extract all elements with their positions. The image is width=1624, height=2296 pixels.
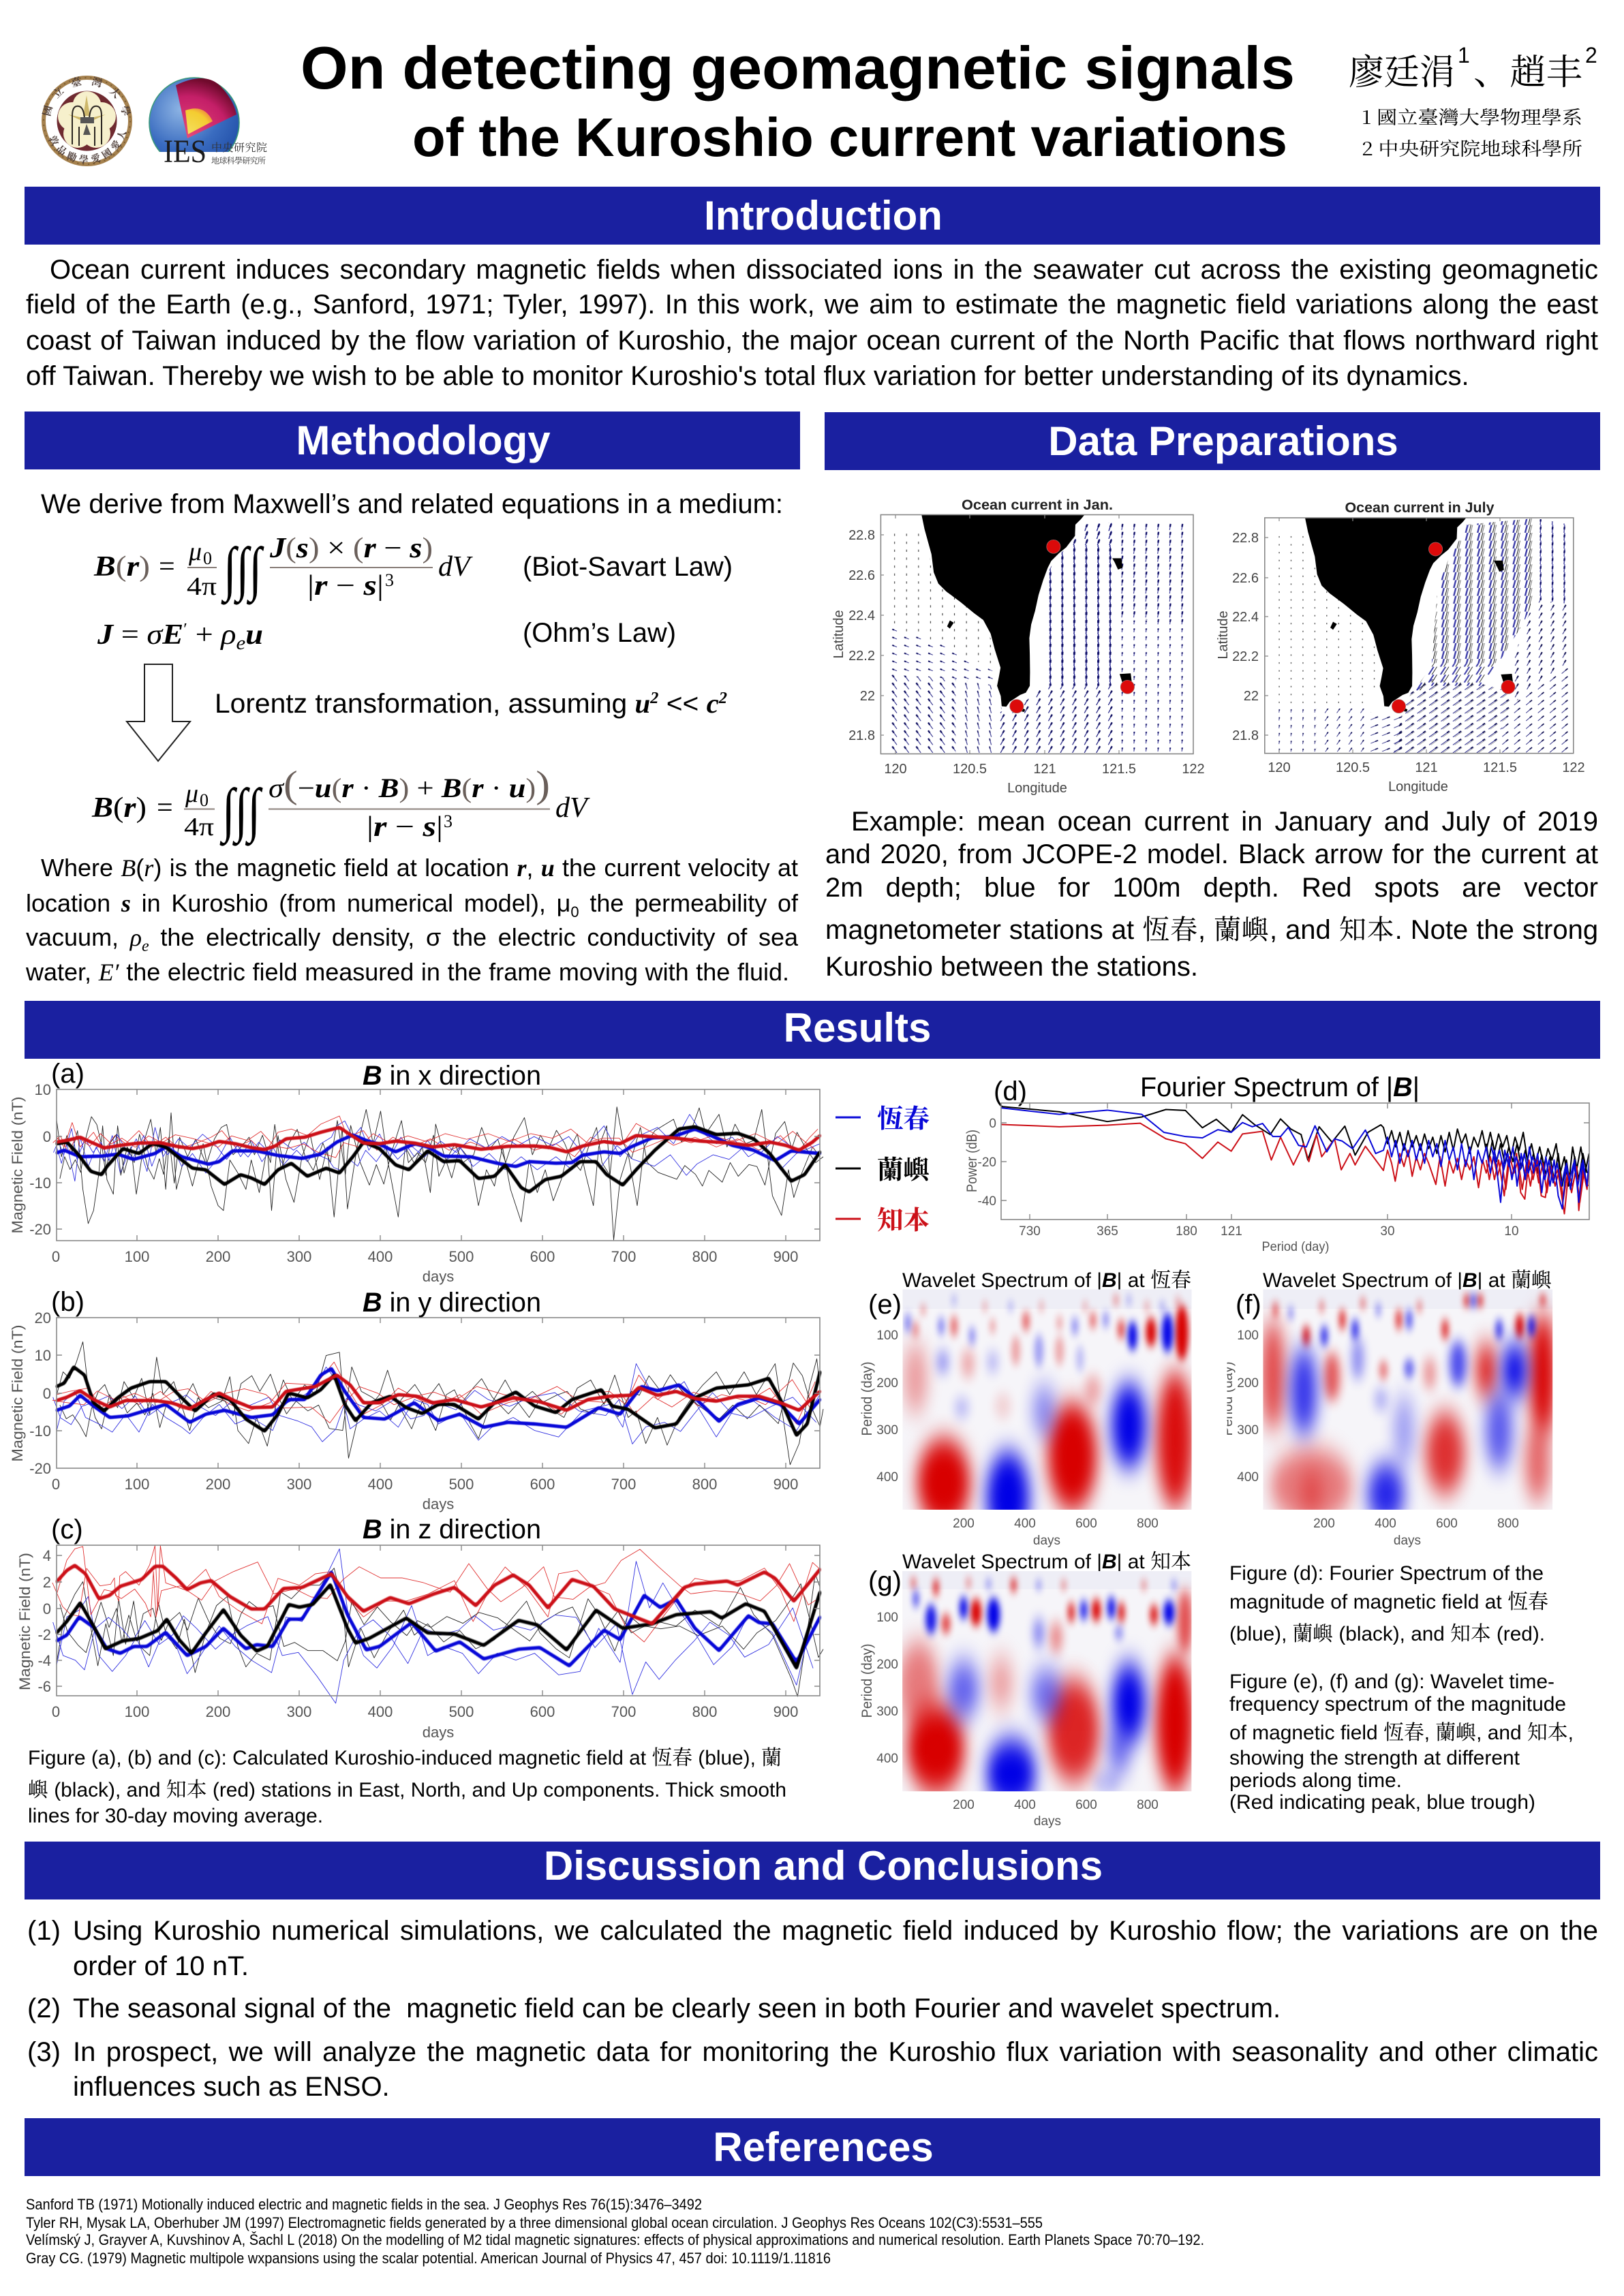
chart (g): wavelet spectrum at Zhiben: Period (day) bbox=[859, 1643, 875, 1718]
heading: Discussion and Conclusions: Discussion and Conclusions bbox=[544, 1843, 1103, 1889]
equation: Ohm's law: ρ bbox=[219, 619, 236, 651]
chart (d): Fourier spectrum: Power (dB) bbox=[964, 1130, 980, 1192]
chart (e): wavelet spectrum at Hengchun: 200 bbox=[876, 1376, 898, 1391]
methodology intro sentence: We derive from Maxwell’s and related equations in a medium: bbox=[41, 489, 783, 519]
heading: Results bbox=[25, 1001, 1600, 1059]
equation: Biot-Savart law: J(s) × (r − s) bbox=[269, 533, 433, 564]
text block: methodology symbol definitions bbox=[26, 854, 799, 986]
chart (f): wavelet spectrum at Lanyu: 400 bbox=[1237, 1470, 1259, 1485]
chart (b): B in y direction: B in y direction bbox=[363, 1288, 541, 1318]
map: ocean current in January: 121 bbox=[1033, 762, 1056, 777]
equation: induced magnetic field: dV bbox=[555, 792, 590, 824]
text block: discussion and conclusions list: influences such as ENSO. bbox=[73, 2072, 390, 2102]
map: ocean current in July: 22.6 bbox=[1232, 571, 1259, 586]
caption: figure d: magnitude of magnetic field at 恆春 bbox=[1229, 1591, 1548, 1613]
chart (a): B in x direction: 0 bbox=[43, 1128, 51, 1145]
label: Lorentz transformation: Lorentz transformation, assuming u bbox=[215, 688, 650, 719]
chart (b): B in y direction: 800 bbox=[692, 1476, 717, 1493]
text block: data preparations description bbox=[825, 807, 1598, 982]
heading: Data Preparations: Data Preparations bbox=[1048, 418, 1398, 464]
text block: introduction paragraph: coast of Taiwan induced by the flow variation of Kuroshio, the major ocean current of the North Pacific that flows northward right bbox=[26, 326, 1598, 356]
map: ocean current in July: 22.8 bbox=[1232, 531, 1259, 546]
chart (f): wavelet spectrum at Lanyu: 100 bbox=[1237, 1329, 1259, 1343]
chart (b): B in y direction: Magnetic Field (nT) bbox=[9, 1324, 26, 1462]
map: ocean current in January: 22 bbox=[860, 689, 875, 704]
heading: Introduction bbox=[25, 187, 1600, 245]
chart (e): wavelet spectrum at Hengchun: 800 bbox=[1137, 1517, 1159, 1531]
chart (c): B in z direction: -2 bbox=[37, 1626, 51, 1643]
caption: figures a, b and c: 嶼 (black), and 知本 (red) stations in East, North, and Up components. Thick smooth bbox=[28, 1779, 786, 1801]
chart (g): wavelet spectrum at Zhiben: 400 bbox=[876, 1752, 898, 1766]
equation: Biot-Savart law: dV bbox=[438, 551, 473, 583]
text block: discussion and conclusions list: (1) bbox=[27, 1916, 61, 1946]
chart (a): B in x direction: days bbox=[423, 1268, 454, 1285]
chart (c): B in z direction: 2 bbox=[43, 1574, 51, 1591]
heading: Methodology bbox=[25, 412, 800, 469]
equation: induced magnetic field: σ(−u(r · B) + B(r · u)) bbox=[269, 764, 550, 806]
caption: figures e, f and g: (Red indicating peak, blue trough) bbox=[1229, 1791, 1535, 1814]
chart (b): B in y direction: -20 bbox=[29, 1460, 51, 1477]
equation: induced magnetic field: ∫∫∫ bbox=[219, 777, 263, 846]
map: ocean current in July: 121 bbox=[1415, 760, 1438, 775]
caption: figure d: (blue), 蘭嶼 (black), and 知本 (red). bbox=[1229, 1623, 1545, 1645]
chart (a): B in x direction: -20 bbox=[29, 1221, 51, 1238]
chart (a): B in x direction: B in x direction bbox=[363, 1061, 541, 1091]
chart (a): B in x direction: 400 bbox=[368, 1248, 393, 1265]
equation: Ohm's law: J = σE bbox=[97, 619, 181, 651]
chart (b): B in y direction: 300 bbox=[287, 1476, 311, 1493]
text block: discussion and conclusions list: order of 10 nT. bbox=[73, 1951, 249, 1981]
map: ocean current in July: 121.5 bbox=[1483, 760, 1517, 775]
map: ocean current in July: Latitude bbox=[1216, 610, 1231, 660]
logo: National Taiwan University seal: 敦品勵學愛國愛人 bbox=[49, 131, 127, 164]
map: ocean current in January: Longitude bbox=[1007, 781, 1067, 796]
text block: introduction paragraph: Ocean current induces secondary magnetic fields when dissociated ions in the seawater cut across the existing geomagnetic bbox=[50, 255, 1598, 285]
chart (a): B in x direction: 800 bbox=[692, 1248, 717, 1265]
references list: Gray CG. (1979) Magnetic multipole wxpansions using the scalar potential. American Journal of Physics 47, 457 doi: 10.1119/1.11816 bbox=[26, 2250, 831, 2267]
caption: figure d: Figure (d): Fourier Spectrum of the bbox=[1229, 1562, 1544, 1585]
caption: figure d bbox=[1229, 1562, 1548, 1645]
chart (b): B in y direction: 0 bbox=[43, 1385, 51, 1402]
chart (c): B in z direction: 300 bbox=[287, 1703, 311, 1720]
text block: discussion and conclusions list: (2) bbox=[27, 1994, 61, 2023]
map: ocean current in January: 22.4 bbox=[848, 608, 875, 623]
affiliations: 2 中央研究院地球科學所 bbox=[1362, 134, 1582, 161]
chart (c): B in z direction: 400 bbox=[368, 1703, 393, 1720]
chart (c): B in z direction: -6 bbox=[37, 1678, 51, 1695]
equation: Biot-Savart law: 3 bbox=[385, 570, 394, 590]
chart (a): B in x direction: 500 bbox=[449, 1248, 474, 1265]
text block: methodology symbol definitions: location s in Kuroshio (from numerical model), μ0 the permeability of bbox=[26, 889, 798, 920]
chart (b): B in y direction: 900 bbox=[773, 1476, 798, 1493]
label: Lorentz transformation: c bbox=[707, 688, 719, 719]
heading: Results: Results bbox=[784, 1005, 931, 1051]
map: ocean current in July: 120.5 bbox=[1336, 760, 1370, 775]
chart (b): B in y direction bbox=[9, 1287, 823, 1512]
equation: Biot-Savart law: = bbox=[159, 551, 175, 583]
chart (g): wavelet spectrum at Zhiben: 600 bbox=[1075, 1798, 1097, 1812]
heading: References: References bbox=[713, 2124, 934, 2170]
text block: data preparations description: 2m depth; blue for 100m depth. Red spots are vector bbox=[825, 873, 1598, 903]
text block: discussion and conclusions list: The seasonal signal of the magnetic field can be clearly seen in both Fourier and wavelet spectrum. bbox=[73, 1994, 1281, 2023]
chart (b): B in y direction: 200 bbox=[206, 1476, 230, 1493]
caption: figures a, b and c bbox=[28, 1747, 786, 1827]
chart (g): wavelet spectrum at Zhiben: Wavelet Spectrum of |B| at 知本 bbox=[902, 1551, 1191, 1573]
text block: methodology symbol definitions: Where B(r) is the magnetic field at location r, u the current velocity at bbox=[41, 854, 798, 882]
text block: methodology symbol definitions: water, E′ the electric field measured in the frame moving with the fluid. bbox=[26, 958, 789, 986]
chart (a): B in x direction: 200 bbox=[206, 1248, 230, 1265]
chart (g): wavelet spectrum at Zhiben: 300 bbox=[876, 1705, 898, 1719]
map: ocean current in January: Ocean current in Jan. bbox=[962, 497, 1113, 513]
caption: figures e, f and g: frequency spectrum of the magnitude bbox=[1229, 1693, 1566, 1716]
equation: Biot-Savart law bbox=[93, 533, 473, 605]
chart (b): B in y direction: 10 bbox=[35, 1347, 51, 1364]
chart (d): Fourier spectrum: -40 bbox=[978, 1194, 996, 1209]
equation: induced magnetic field: B(r) bbox=[91, 792, 147, 824]
chart (d): Fourier spectrum: Fourier Spectrum of |B| bbox=[1140, 1072, 1420, 1102]
chart (g): wavelet spectrum at Zhiben: 100 bbox=[876, 1611, 898, 1625]
chart (a): B in x direction: (a) bbox=[51, 1059, 85, 1089]
chart (f): wavelet spectrum at Lanyu bbox=[1216, 1269, 1556, 1548]
caption: figures e, f and g: showing the strength at different bbox=[1229, 1747, 1520, 1769]
label: Lorentz transformation: << bbox=[658, 689, 707, 719]
chart (b): B in y direction: 600 bbox=[530, 1476, 555, 1493]
caption: figures e, f and g: periods along time. bbox=[1229, 1769, 1402, 1792]
chart (f): wavelet spectrum at Lanyu: 200 bbox=[1313, 1517, 1335, 1531]
caption: figures a, b and c: Figure (a), (b) and (c): Calculated Kuroshio-induced magnetic field at 恆春 (blue), 蘭 bbox=[28, 1747, 782, 1769]
chart (g): wavelet spectrum at Zhiben: 400 bbox=[1014, 1798, 1036, 1812]
chart (a): B in x direction: 600 bbox=[530, 1248, 555, 1265]
authors: 、趙丰 bbox=[1473, 44, 1582, 95]
chart (a): B in x direction: 100 bbox=[125, 1248, 149, 1265]
map: ocean current in July bbox=[1216, 500, 1585, 794]
references list: Tyler RH, Mysak LA, Oberhuber JM (1997) Electromagnetic fields generated by a three dimensional global ocean circulation. J Geophys Res Oceans 102(C3):5531–555 bbox=[26, 2214, 1043, 2231]
chart (f): wavelet spectrum at Lanyu: 400 bbox=[1375, 1517, 1396, 1531]
chart (f): wavelet spectrum at Lanyu: (f) bbox=[1236, 1290, 1261, 1320]
chart (c): B in z direction: -4 bbox=[37, 1652, 51, 1669]
chart (c): B in z direction: 0 bbox=[52, 1703, 60, 1720]
equation: induced magnetic field bbox=[91, 764, 590, 846]
text block: data preparations description: and 2020, from JCOPE-2 model. Black arrow for the current at bbox=[825, 839, 1598, 869]
map: ocean current in July: 22.4 bbox=[1232, 610, 1259, 625]
heading: Data Preparations bbox=[825, 412, 1600, 470]
equation: Biot-Savart law: 0 bbox=[203, 548, 212, 568]
chart (e): wavelet spectrum at Hengchun: 400 bbox=[1014, 1517, 1036, 1531]
caption: figures e, f and g: of magnetic field 恆春, 蘭嶼, and 知本, bbox=[1229, 1722, 1574, 1744]
chart (e): wavelet spectrum at Hengchun bbox=[859, 1269, 1194, 1548]
chart (e): wavelet spectrum at Hengchun: 600 bbox=[1075, 1517, 1097, 1531]
affiliations bbox=[1362, 103, 1582, 161]
text block: methodology symbol definitions: vacuum, ρe the electrically density, σ the electric conductivity of sea bbox=[26, 923, 798, 955]
chart (f): wavelet spectrum at Lanyu: Period (day) bbox=[1220, 1361, 1236, 1436]
chart (a): B in x direction: 900 bbox=[773, 1248, 798, 1265]
chart (a): B in x direction: 300 bbox=[287, 1248, 311, 1265]
chart (d): Fourier spectrum: 30 bbox=[1380, 1224, 1395, 1239]
equation: Ohm's law: e bbox=[236, 633, 245, 654]
legend: stations: 蘭嶼 bbox=[877, 1149, 930, 1186]
equation: Ohm's law: + bbox=[187, 619, 221, 651]
equation: Biot-Savart law: μ bbox=[188, 538, 202, 566]
chart (c): B in z direction bbox=[16, 1515, 823, 1741]
text block: data preparations description: Kuroshio between the stations. bbox=[825, 952, 1198, 982]
chart (b): B in y direction: (b) bbox=[51, 1287, 85, 1317]
title: of the Kuroshio current variations bbox=[412, 107, 1287, 168]
chart (g): wavelet spectrum at Zhiben: 200 bbox=[953, 1798, 975, 1812]
chart (e): wavelet spectrum at Hengchun: (e) bbox=[868, 1290, 902, 1320]
label: Biot-Savart Law: (Biot-Savart Law) bbox=[523, 552, 733, 582]
heading: References bbox=[25, 2118, 1600, 2176]
text block: data preparations description: magnetometer stations at 恆春, 蘭嶼, and 知本. Note the strong bbox=[825, 908, 1598, 947]
chart (d): Fourier spectrum: 10 bbox=[1504, 1224, 1519, 1239]
text block: introduction paragraph: off Taiwan. Thereby we wish to be able to monitor Kuroshio's total flux variation for better understanding of its dynamics. bbox=[26, 361, 1469, 391]
logo: National Taiwan University seal: 國立臺灣大學 bbox=[42, 76, 131, 116]
equation: Biot-Savart law: 4π bbox=[187, 572, 217, 601]
chart (b): B in y direction: 0 bbox=[52, 1476, 60, 1493]
heading: Methodology: Methodology bbox=[296, 418, 551, 463]
map: ocean current in January: 22.2 bbox=[848, 649, 875, 664]
logo: Institute of Earth Sciences: 地球科學研究所 bbox=[211, 155, 266, 166]
chart (e): wavelet spectrum at Hengchun: 300 bbox=[876, 1423, 898, 1438]
map: ocean current in January: Latitude bbox=[831, 610, 846, 659]
map: ocean current in January: 120 bbox=[884, 762, 907, 777]
map: ocean current in July: 21.8 bbox=[1232, 728, 1259, 743]
chart (b): B in y direction: 100 bbox=[125, 1476, 149, 1493]
equation: induced magnetic field: 0 bbox=[200, 790, 209, 810]
chart (e): wavelet spectrum at Hengchun: Wavelet Spectrum of |B| at 恆春 bbox=[902, 1269, 1191, 1292]
chart (c): B in z direction: days bbox=[423, 1724, 454, 1741]
chart (c): B in z direction: 200 bbox=[206, 1703, 230, 1720]
map: ocean current in January: 21.8 bbox=[848, 728, 875, 743]
map: ocean current in January: 22.6 bbox=[848, 568, 875, 583]
chart (f): wavelet spectrum at Lanyu: 600 bbox=[1436, 1517, 1458, 1531]
equation: induced magnetic field: |r − s| bbox=[367, 811, 443, 843]
chart (b): B in y direction: -10 bbox=[29, 1423, 51, 1440]
arrow: derivation down arrow bbox=[127, 664, 190, 761]
chart (g): wavelet spectrum at Zhiben: days bbox=[1034, 1814, 1061, 1829]
chart (g): wavelet spectrum at Zhiben: (g) bbox=[868, 1566, 902, 1596]
chart (g): wavelet spectrum at Zhiben bbox=[859, 1551, 1194, 1829]
map: ocean current in January: 121.5 bbox=[1102, 762, 1136, 777]
heading: Discussion and Conclusions bbox=[25, 1842, 1600, 1899]
map: ocean current in July: Longitude bbox=[1388, 779, 1448, 794]
chart (c): B in z direction: 500 bbox=[449, 1703, 474, 1720]
map: ocean current in July: 120 bbox=[1268, 760, 1291, 775]
chart (a): B in x direction: 0 bbox=[52, 1248, 60, 1265]
text block: discussion and conclusions list: Using Kuroshio numerical simulations, we calculated the magnetic field induced by Kuroshio flow; the variations are on the bbox=[73, 1916, 1598, 1946]
equation: Biot-Savart law: ∫∫∫ bbox=[221, 536, 264, 605]
caption: figures e, f and g: Figure (e), (f) and (g): Wavelet time- bbox=[1229, 1671, 1554, 1693]
caption: figures a, b and c: lines for 30-day moving average. bbox=[28, 1805, 323, 1827]
chart (d): Fourier spectrum: 180 bbox=[1176, 1224, 1197, 1239]
chart (f): wavelet spectrum at Lanyu: 200 bbox=[1237, 1376, 1259, 1391]
equation: Ohm's law: u bbox=[245, 619, 263, 651]
chart (a): B in x direction: Magnetic Field (nT) bbox=[9, 1096, 26, 1234]
map: ocean current in July: 22 bbox=[1244, 689, 1259, 704]
chart (a): B in x direction: -10 bbox=[29, 1175, 51, 1192]
chart (c): B in z direction: Magnetic Field (nT) bbox=[16, 1553, 33, 1690]
text block: introduction paragraph bbox=[26, 255, 1598, 391]
chart (e): wavelet spectrum at Hengchun: days bbox=[1033, 1534, 1060, 1548]
references list: Velímský J, Grayver A, Kuvshinov A, Šachl L (2018) On the modelling of M2 tidal magnetic signatures: effects of physical approximations and numerical resolution. Earth Planets Space 70:70–192. bbox=[26, 2231, 1204, 2248]
legend: stations bbox=[836, 1098, 930, 1237]
chart (f): wavelet spectrum at Lanyu: 300 bbox=[1237, 1423, 1259, 1438]
map: ocean current in January: 120.5 bbox=[953, 762, 987, 777]
text block: data preparations description: Example: mean ocean current in January and July of 2019 bbox=[851, 807, 1598, 837]
chart (d): Fourier spectrum: (d) bbox=[994, 1076, 1027, 1106]
chart (c): B in z direction: 4 bbox=[43, 1547, 51, 1564]
chart (d): Fourier spectrum: 121 bbox=[1221, 1224, 1242, 1239]
text block: discussion and conclusions list: (3) bbox=[27, 2037, 61, 2067]
map: ocean current in July: 22.2 bbox=[1232, 649, 1259, 664]
logo: Institute of Earth Sciences: 中央研究院 bbox=[211, 139, 267, 155]
chart (d): Fourier spectrum: 730 bbox=[1019, 1224, 1041, 1239]
heading: Introduction: Introduction bbox=[704, 193, 943, 238]
authors: 1 bbox=[1458, 43, 1470, 67]
map: ocean current in January: 22.8 bbox=[848, 528, 875, 543]
authors: 廖廷涓 bbox=[1349, 44, 1455, 95]
equation: induced magnetic field: 4π bbox=[184, 813, 214, 841]
chart (f): wavelet spectrum at Lanyu: Wavelet Spectrum of |B| at 蘭嶼 bbox=[1263, 1269, 1552, 1292]
chart (d): Fourier spectrum: 365 bbox=[1097, 1224, 1118, 1239]
equation: Biot-Savart law: |r − s| bbox=[307, 570, 384, 602]
equation: induced magnetic field: μ bbox=[185, 779, 198, 808]
equation: induced magnetic field: 3 bbox=[444, 811, 453, 831]
chart (a): B in x direction: 10 bbox=[35, 1081, 51, 1098]
legend: stations: 恆春 bbox=[877, 1098, 930, 1135]
logo: National Taiwan University seal bbox=[42, 76, 132, 166]
chart (b): B in y direction: 700 bbox=[611, 1476, 636, 1493]
chart (b): B in y direction: days bbox=[423, 1495, 454, 1512]
chart (c): B in z direction: (c) bbox=[51, 1515, 83, 1545]
chart (e): wavelet spectrum at Hengchun: 200 bbox=[953, 1517, 975, 1531]
label: Ohm's Law: (Ohm’s Law) bbox=[523, 618, 676, 648]
references list bbox=[26, 2196, 1204, 2267]
title: On detecting geomagnetic signals bbox=[301, 34, 1295, 102]
text block: discussion and conclusions list: In prospect, we will analyze the magnetic data for monitoring the Kuroshio flux variation with seasonality and other climatic bbox=[73, 2037, 1598, 2067]
chart (c): B in z direction: 600 bbox=[530, 1703, 555, 1720]
chart (d): Fourier spectrum bbox=[964, 1072, 1589, 1254]
authors bbox=[1349, 43, 1597, 95]
text block: discussion and conclusions list bbox=[27, 1916, 1598, 2102]
references list: Sanford TB (1971) Motionally induced electric and magnetic fields in the sea. J Geophys Res 76(15):3476–3492 bbox=[26, 2196, 702, 2213]
chart (c): B in z direction: 0 bbox=[43, 1600, 51, 1617]
chart (c): B in z direction: 800 bbox=[692, 1703, 717, 1720]
chart (c): B in z direction: 100 bbox=[125, 1703, 149, 1720]
chart (c): B in z direction: 900 bbox=[773, 1703, 798, 1720]
chart (b): B in y direction: 20 bbox=[35, 1309, 51, 1327]
map: ocean current in July: Ocean current in July bbox=[1345, 500, 1495, 516]
map: ocean current in January: 122 bbox=[1182, 762, 1205, 777]
chart (d): Fourier spectrum: Period (day) bbox=[1262, 1240, 1329, 1254]
chart (e): wavelet spectrum at Hengchun: 400 bbox=[876, 1470, 898, 1485]
equation: Ohm's law: ′ bbox=[183, 621, 187, 638]
chart (g): wavelet spectrum at Zhiben: 200 bbox=[876, 1658, 898, 1672]
map: ocean current in January bbox=[831, 497, 1205, 796]
text block: introduction paragraph: field of the Earth (e.g., Sanford, 1971; Tyler, 1997). In this work, we aim to estimate the magnetic field variations along the east bbox=[26, 290, 1598, 320]
legend: stations: 知本 bbox=[877, 1199, 930, 1237]
caption: figures e, f and g bbox=[1229, 1671, 1574, 1814]
authors: 2 bbox=[1585, 43, 1597, 67]
chart (b): B in y direction: 500 bbox=[449, 1476, 474, 1493]
chart (e): wavelet spectrum at Hengchun: Period (day) bbox=[859, 1361, 875, 1436]
chart (g): wavelet spectrum at Zhiben: 800 bbox=[1137, 1798, 1159, 1812]
label: Lorentz transformation: 2 bbox=[718, 689, 727, 707]
chart (d): Fourier spectrum: -20 bbox=[978, 1155, 996, 1170]
chart (a): B in x direction: 700 bbox=[611, 1248, 636, 1265]
chart (c): B in z direction: 700 bbox=[611, 1703, 636, 1720]
title bbox=[301, 34, 1295, 168]
chart (c): B in z direction: B in z direction bbox=[363, 1515, 541, 1545]
chart (e): wavelet spectrum at Hengchun: 100 bbox=[876, 1329, 898, 1343]
chart (b): B in y direction: 400 bbox=[368, 1476, 393, 1493]
label: Lorentz transformation: 2 bbox=[649, 689, 658, 707]
logo: Institute of Earth Sciences: IES bbox=[164, 134, 206, 170]
chart (a): B in x direction bbox=[9, 1059, 823, 1285]
chart (d): Fourier spectrum: 0 bbox=[989, 1117, 996, 1131]
equation: induced magnetic field: = bbox=[157, 792, 173, 824]
affiliations: 1 國立臺灣大學物理學系 bbox=[1362, 103, 1582, 129]
equation: Biot-Savart law: B(r) bbox=[93, 551, 150, 583]
chart (f): wavelet spectrum at Lanyu: 800 bbox=[1497, 1517, 1519, 1531]
map: ocean current in July: 122 bbox=[1562, 760, 1585, 775]
logo: Institute of Earth Sciences bbox=[149, 78, 267, 170]
chart (f): wavelet spectrum at Lanyu: days bbox=[1394, 1534, 1421, 1548]
